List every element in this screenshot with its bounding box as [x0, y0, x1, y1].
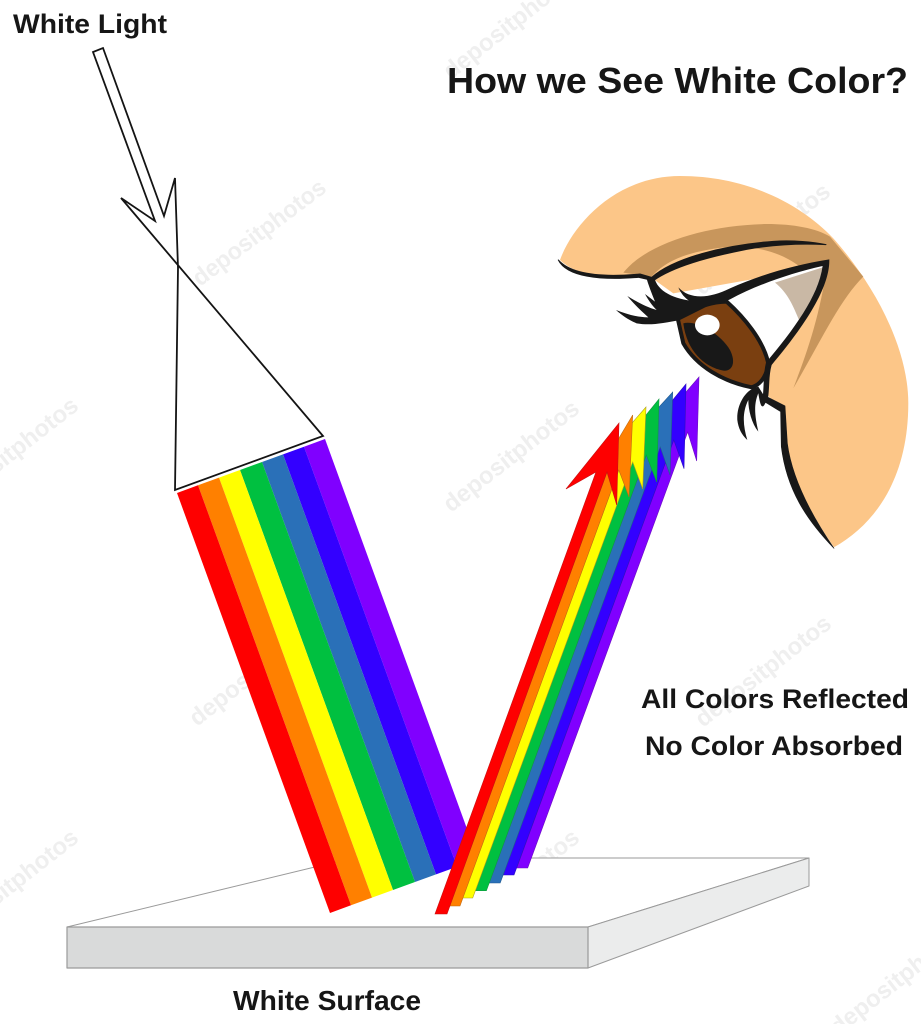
- iris: [677, 302, 768, 387]
- lashes upper: [616, 277, 727, 324]
- watermark: depositphotos: [689, 178, 836, 301]
- watermark: depositphotos: [690, 610, 837, 733]
- watermark: depositphotos: [438, 395, 585, 518]
- lashes lower: [737, 387, 767, 440]
- highlight: [695, 315, 720, 335]
- heading: title: How we See White Color?: [447, 60, 908, 101]
- eye illustration: [558, 176, 908, 548]
- white light arrow and prism: [93, 48, 323, 490]
- yellow arrow: [462, 407, 646, 898]
- brow crease line: [558, 241, 826, 281]
- incident rainbow beam: [177, 439, 478, 913]
- eye white: [687, 262, 827, 363]
- white surface slab: [67, 858, 809, 968]
- text block: no color absorbed: No Color Absorbed: [645, 731, 903, 761]
- text block: all colors reflected: All Colors Reflected: [641, 684, 909, 714]
- indigo arrow: [503, 384, 686, 875]
- upper eyelid and corner lines: [678, 259, 829, 402]
- eyelid shadow: [623, 224, 863, 388]
- label: white light: White Light: [13, 9, 167, 39]
- orange arrow: [449, 415, 633, 906]
- watermark: depositphotos: [187, 174, 331, 292]
- label: white surface: White Surface: [233, 985, 421, 1016]
- reflected rainbow arrows: [435, 377, 699, 914]
- pupil: [683, 323, 733, 371]
- nose line: [763, 395, 834, 548]
- sclera shadow: [775, 267, 823, 321]
- watermark: depositphotos: [438, 824, 585, 947]
- violet arrow: [517, 377, 699, 868]
- red arrow: [435, 423, 619, 914]
- skin: [560, 176, 908, 547]
- green arrow: [475, 399, 659, 891]
- watermark: depositphotos: [184, 609, 331, 732]
- blue arrow: [489, 392, 673, 883]
